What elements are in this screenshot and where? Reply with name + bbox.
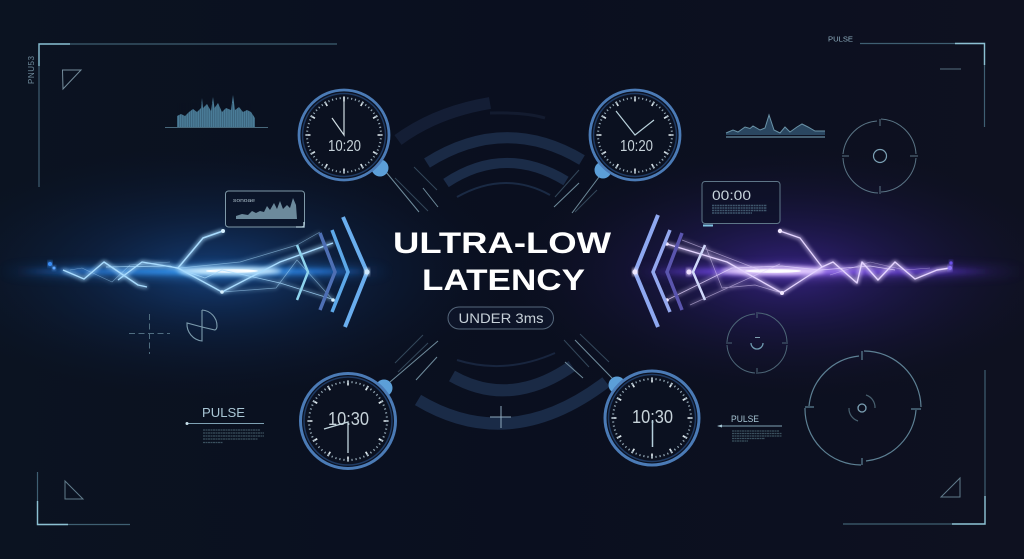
small line chart top right [726,115,825,137]
quarter circle icon [187,310,217,341]
corner bracket top left [27,44,337,187]
clock top right [554,90,680,213]
bolts [63,231,335,300]
target reticle top right [842,119,918,194]
clock bottom right [564,334,699,465]
rotated label: PNU53 [27,55,36,84]
chevrons [297,217,367,327]
corner bracket top right: PULSE [828,34,853,44]
clock top right: 10:20 [620,138,653,155]
beam [630,266,1024,277]
title [393,227,612,297]
connector lines [390,335,438,382]
pulse label left: PULSE [202,406,245,420]
corner bracket top right [828,34,984,127]
data box right: 00:00 [712,188,751,203]
clock bottom left: 10:30 [328,409,369,429]
lightning left [0,217,390,327]
title: LATENCY [422,264,585,297]
corner bracket bottom left [38,472,130,524]
data box left [226,191,304,227]
bolts [667,231,950,305]
bottom concentric arcs [418,353,606,424]
connector lines [554,170,599,213]
waveform chart top left [165,95,268,128]
title: ULTRA-LOW [393,227,612,260]
data box right [702,182,780,226]
top concentric arcs [398,103,582,197]
lightning right [630,215,1024,327]
pulse label right [717,414,782,441]
small target reticle [726,312,788,374]
clock top left: 10:20 [328,138,361,155]
clock bottom right: 10:30 [632,407,673,427]
badge: under 3ms: UNDER 3ms [458,310,544,326]
clock top left [299,90,438,212]
pulse label right: PULSE [731,414,759,425]
data box left: sonoae [233,198,255,204]
crosshair [129,314,170,354]
chevrons [635,215,705,327]
corner bracket bottom right [843,370,985,524]
beam [0,266,390,277]
badge: under 3ms [448,307,554,329]
plus marker [490,406,511,428]
connector lines [564,334,612,378]
connector lines [386,167,438,212]
pulse label left [186,406,264,442]
large target reticle [805,351,921,465]
triangle [62,70,81,89]
clock bottom left [300,335,438,468]
